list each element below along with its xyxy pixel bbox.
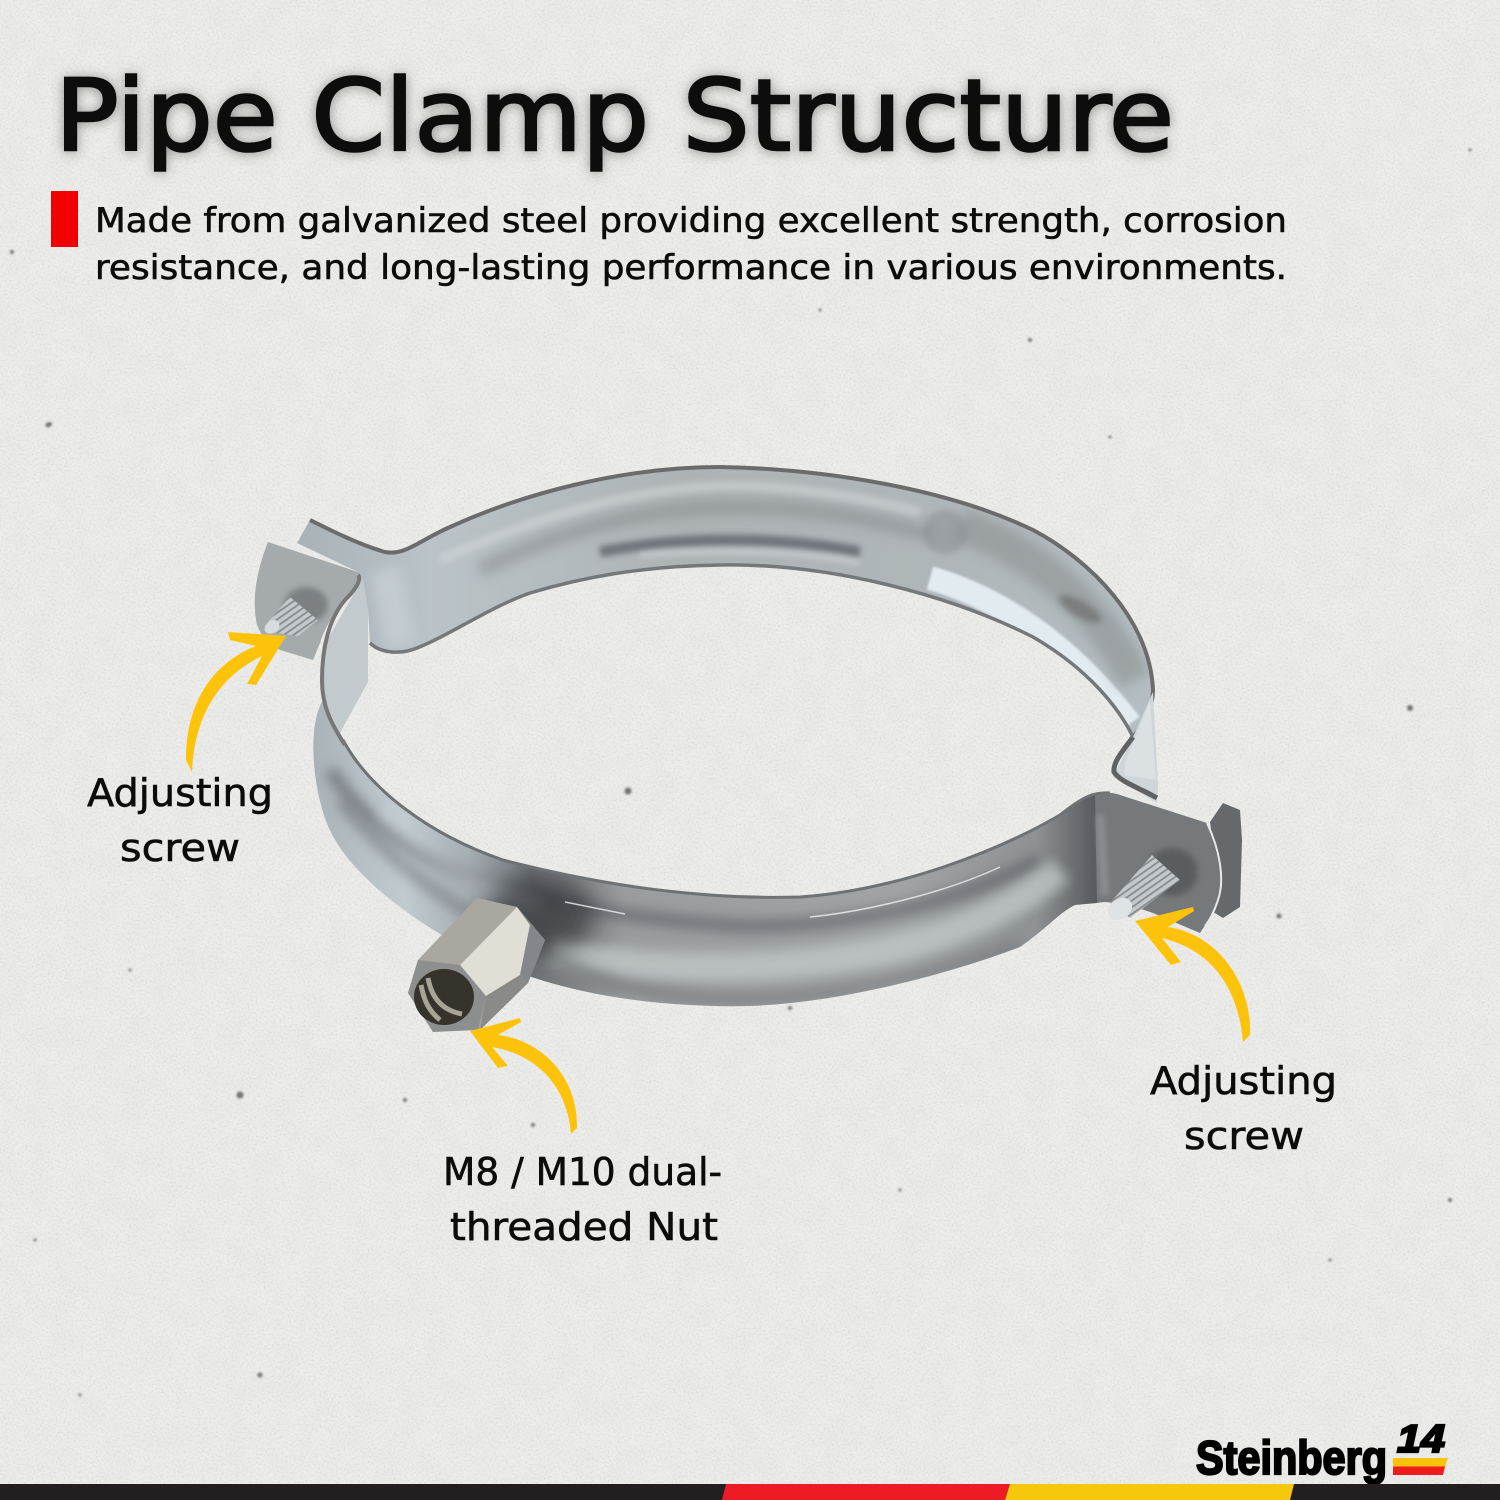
label: adjusting screw right: Adjusting xyxy=(1150,1059,1337,1103)
left clamp flange xyxy=(255,542,361,745)
label: adjusting screw right: screw xyxy=(1184,1114,1304,1158)
front band of clamp xyxy=(313,700,1110,1006)
logo: Steinberg 14: Steinberg xyxy=(1196,1431,1387,1484)
logo: Steinberg 14: 14 xyxy=(1397,1418,1445,1461)
label: dual-threaded nut: threaded Nut xyxy=(450,1205,718,1249)
left adjusting screw xyxy=(262,597,318,637)
arrow: dual-threaded nut xyxy=(470,1018,577,1134)
label: adjusting screw left: screw xyxy=(120,826,240,870)
label: dual-threaded nut xyxy=(443,1150,722,1249)
title: Pipe Clamp Structure xyxy=(55,59,1174,174)
inner face of left strip xyxy=(323,578,368,733)
right adjusting screw xyxy=(1104,855,1180,925)
dual-threaded nut xyxy=(408,898,545,1032)
logo: Steinberg 14 xyxy=(1196,1418,1448,1484)
description text xyxy=(95,201,1287,288)
label: adjusting screw right xyxy=(1150,1059,1337,1158)
description text: Made from galvanized steel providing excellent strength, corrosion xyxy=(95,201,1287,241)
rear plate behind right screw xyxy=(1210,803,1242,918)
label: adjusting screw left xyxy=(87,771,273,870)
label: adjusting screw left: Adjusting xyxy=(87,771,273,815)
right tab of back band xyxy=(1113,692,1158,803)
label: dual-threaded nut: M8 / M10 dual- xyxy=(443,1150,722,1194)
arrow: right adjusting screw xyxy=(1135,907,1250,1042)
bottom tricolor bar xyxy=(0,1484,1500,1500)
red accent bar xyxy=(51,191,78,247)
right clamp flange xyxy=(1095,793,1221,933)
arrow: left adjusting screw xyxy=(186,632,286,772)
back band of clamp xyxy=(297,467,1153,737)
description text: resistance, and long-lasting performance in various environments. xyxy=(95,248,1287,288)
pipe clamp photo illustration xyxy=(255,467,1242,1032)
